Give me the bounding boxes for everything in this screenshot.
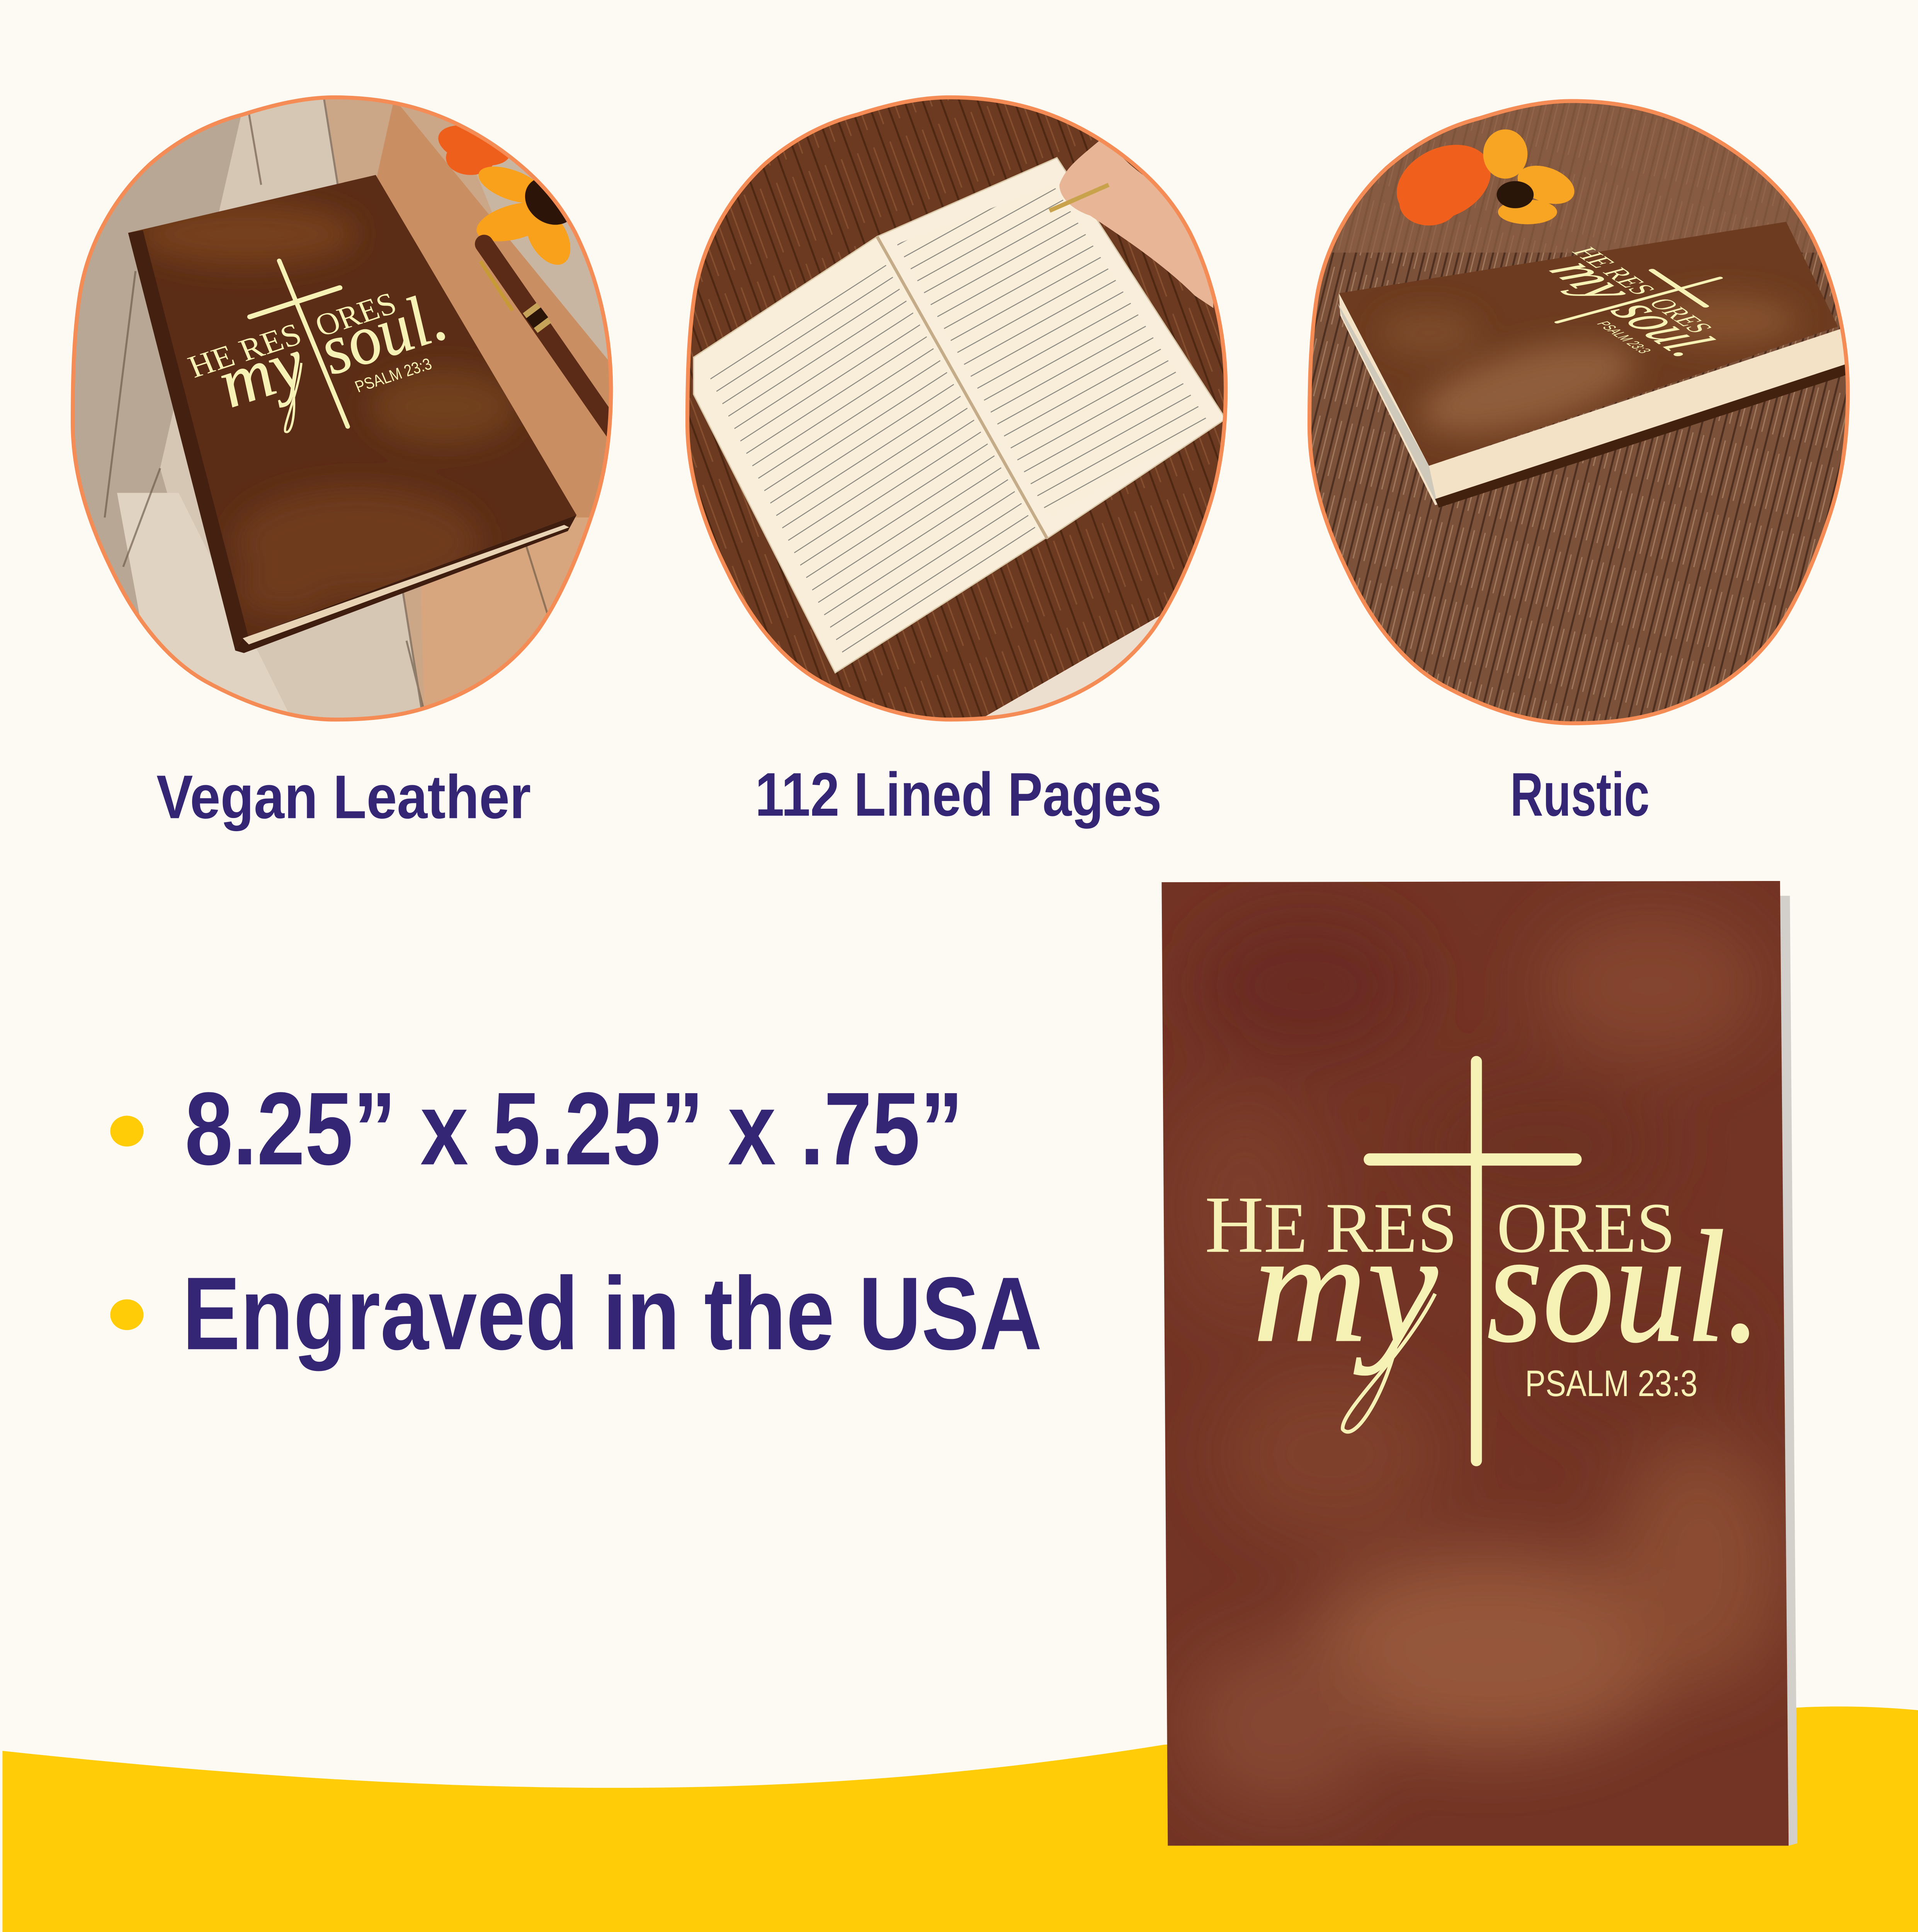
engraved logo: soul. xyxy=(308,277,457,389)
engraved logo: psalm reference: PSALM 23:3 xyxy=(1525,1363,1697,1404)
cover shadow xyxy=(1780,896,1797,1846)
engraved logo: cross xyxy=(1364,1056,1582,1466)
book cover xyxy=(1330,209,1848,474)
engraved logo: HE RES xyxy=(1565,245,1663,298)
bullet: engraved xyxy=(110,1299,143,1330)
engraved logo: my xyxy=(1533,254,1654,306)
icon: wooden pen xyxy=(480,244,616,434)
engraved logo: HE RES xyxy=(183,316,307,385)
engraved logo: he restores: ORES xyxy=(1497,1189,1675,1268)
hand with pen xyxy=(1049,138,1213,308)
left page xyxy=(694,236,1047,673)
caption: rustic: Rustic xyxy=(1510,760,1649,829)
right page xyxy=(877,158,1226,538)
right page ruled lines xyxy=(897,185,1210,517)
bullet: dimensions xyxy=(110,1116,143,1146)
engraved logo: soul. xyxy=(1595,295,1739,363)
icon: orange flower xyxy=(1384,130,1503,235)
photo: rustic journal on wood table xyxy=(1300,92,1860,733)
large journal front cover xyxy=(1158,877,1799,1851)
engraved logo: ORES xyxy=(1641,296,1720,336)
text: engraved in the USA: Engraved in the USA xyxy=(182,1256,1042,1372)
engraved logo: my xyxy=(206,323,317,422)
rug corner xyxy=(967,606,1201,727)
text: dimensions: 8.25” x 5.25” x .75” xyxy=(185,1071,963,1186)
book pages and spine xyxy=(1338,293,1848,508)
caption: vegan leather: Vegan Leather xyxy=(156,762,531,831)
book gutter shadow xyxy=(877,236,1047,538)
icon: yellow sunflower xyxy=(1483,129,1580,224)
engraved logo: PSALM 23:3 xyxy=(352,355,434,396)
engraved logo: he restores xyxy=(1205,1179,1675,1270)
left page ruled lines xyxy=(709,262,1037,653)
caption: 112 lined pages: 112 Lined Pages xyxy=(755,760,1161,829)
icon: yellow sunflower xyxy=(476,167,570,265)
book back cover and pages xyxy=(235,515,576,653)
book cover xyxy=(111,160,591,665)
photo: vegan leather journal on whitewashed wood xyxy=(68,92,616,739)
yellow wave footer xyxy=(2,1706,1918,1932)
leather cover xyxy=(1158,877,1799,1851)
engraved logo: my soul xyxy=(1253,1198,1762,1432)
engraved logo: my soul: my xyxy=(1253,1198,1439,1376)
engraved logo: my soul: soul. xyxy=(1487,1198,1762,1375)
engraved logo: he restores: HE RES xyxy=(1205,1179,1457,1270)
photo: open journal with lined pages xyxy=(678,92,1238,727)
engraved logo xyxy=(1484,230,1797,373)
engraved logo: ORES xyxy=(310,286,401,344)
engraved logo xyxy=(160,218,473,467)
engraved logo: PSALM 23:3 xyxy=(1593,320,1655,355)
icon: orange flower xyxy=(438,125,508,175)
